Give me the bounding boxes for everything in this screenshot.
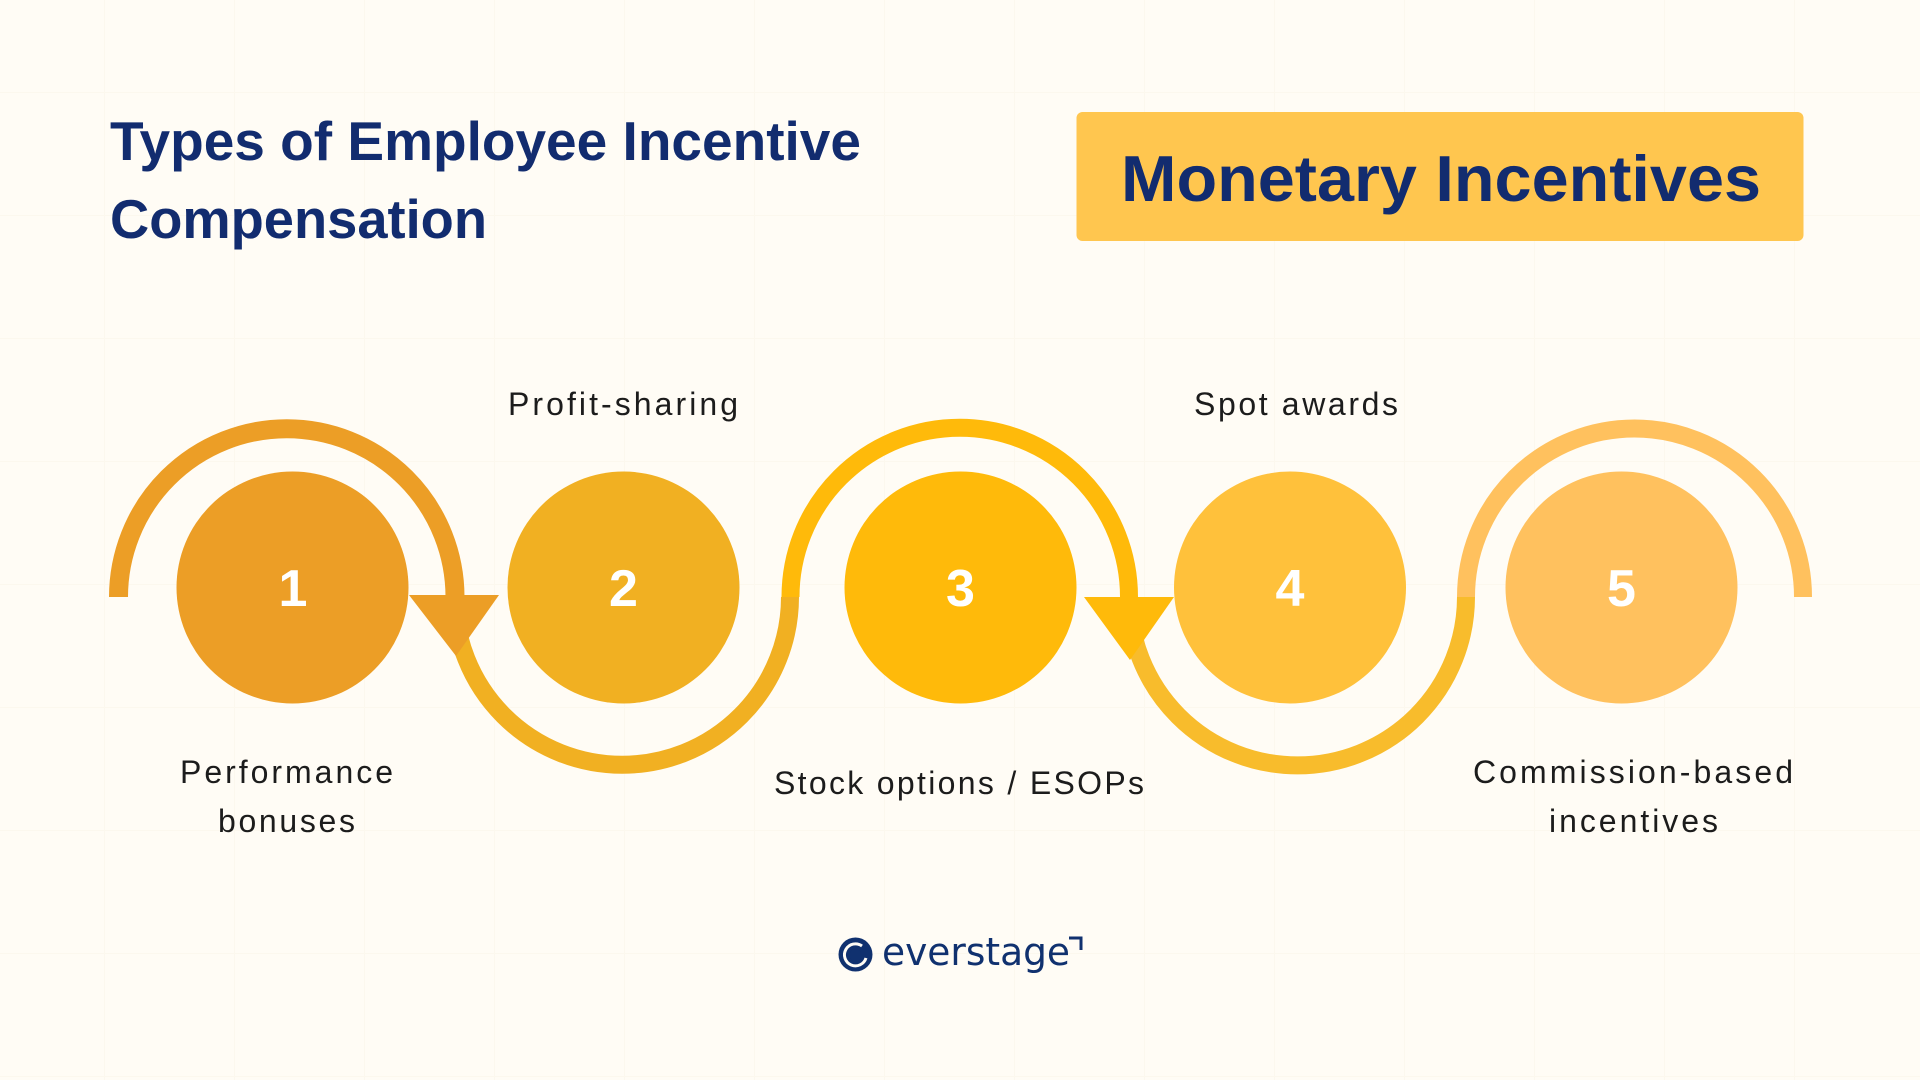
label: commission-based incentives: incentives (1549, 803, 1718, 839)
title: Types of Employee Incentive (110, 110, 861, 172)
label: performance bonuses (180, 754, 393, 839)
label: performance bonuses: bonuses (218, 803, 355, 839)
step 4 circle (1174, 472, 1406, 704)
title: Compensation (110, 188, 487, 250)
panel: monetary incentives badge (1076, 112, 1804, 241)
icon: logo corner tick (1069, 938, 1081, 950)
label: profit-sharing: Profit-sharing (508, 386, 738, 422)
arc: step 2 lower curve (454, 597, 790, 765)
panel: monetary incentives badge: Monetary Incentives (1121, 142, 1761, 215)
arc: step 3 upper curve (790, 428, 1129, 597)
step 2 circle (508, 472, 740, 704)
arc: step 4 lower curve (1129, 597, 1466, 765)
label: commission-based incentives (1473, 754, 1793, 839)
step 1 circle (176, 472, 408, 704)
label: commission-based incentives: Commission-based (1473, 754, 1793, 790)
step 3 circle (844, 472, 1076, 704)
label: stock options: Stock options / ESOPs (774, 765, 1144, 801)
step 5 circle: 5 (1607, 560, 1636, 618)
step 3 circle: 3 (946, 560, 975, 618)
logo: everstage (838, 930, 1081, 974)
step 5 circle (1506, 472, 1738, 704)
label: spot awards: Spot awards (1194, 386, 1398, 422)
arrow: step 3 arrowhead (1084, 597, 1174, 660)
step 2 circle: 2 (609, 560, 638, 618)
label: performance bonuses: Performance (180, 754, 393, 790)
arc: step 1 upper curve (118, 429, 455, 597)
arc: step 5 upper curve (1466, 428, 1803, 597)
step 4 circle: 4 (1276, 560, 1305, 618)
logo wordmark: everstage (882, 930, 1070, 974)
title (110, 110, 861, 250)
step 1 circle: 1 (279, 560, 307, 618)
icon: everstage mark (838, 938, 872, 972)
arrow: step 1 arrowhead (409, 595, 499, 656)
